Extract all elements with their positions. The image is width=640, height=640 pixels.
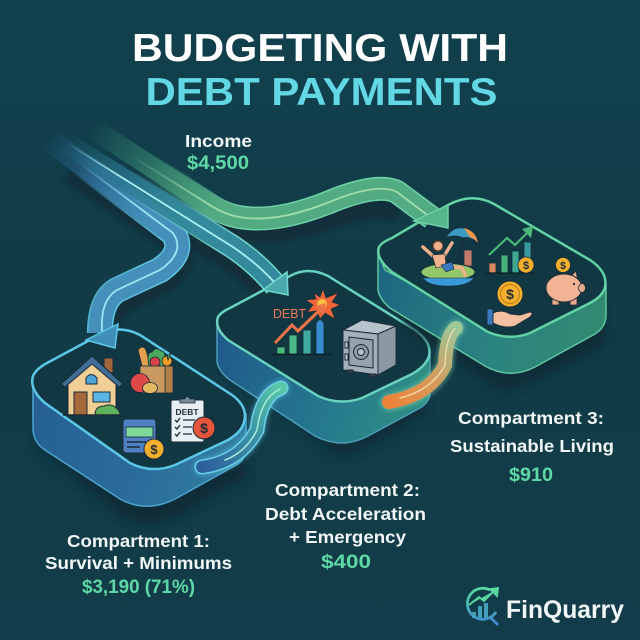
baseline: [272, 354, 332, 356]
logo: FinQuarry: [467, 588, 624, 625]
hand: [493, 311, 532, 327]
inner ring: [500, 284, 520, 304]
text: income: $4,500: [187, 153, 249, 174]
logo wordmark: FinQuarry: [506, 596, 624, 624]
calculator screen: [126, 427, 153, 437]
large coin: [497, 281, 523, 307]
arrow tip: [315, 303, 326, 315]
arrow tip: [522, 226, 533, 238]
icon: debt clipboard: [171, 396, 215, 442]
arrow: income to compartment 3: [80, 120, 448, 228]
arrow: income to compartment 1: [50, 140, 177, 348]
ear: [571, 271, 578, 281]
logo arrow: [469, 588, 498, 605]
person torso: [432, 254, 446, 268]
text: compartment 3: $910: [509, 465, 553, 486]
gold coin symbol: $: [150, 442, 158, 457]
text: compartment 2: Debt Acceleration: [265, 504, 426, 524]
umbrella pole: [456, 240, 463, 268]
umbrella accent: [464, 228, 478, 243]
icon: growth chart: [486, 226, 535, 273]
shadow: compartment 1: [36, 400, 248, 522]
logo magnifier ring: [467, 588, 498, 625]
icon: safe: [343, 320, 396, 377]
panel: compartment 3: [378, 198, 606, 390]
connector: compartment 1 to 2: [202, 388, 281, 467]
side wall: compartment 3: [378, 253, 606, 373]
title: BUDGETING WITH: [132, 27, 508, 70]
water: [423, 278, 474, 286]
clipboard clip: [180, 396, 195, 403]
umbrella canopy: [446, 228, 478, 243]
icon: beach relaxation: [421, 228, 478, 286]
clipboard label: DEBT: [176, 407, 199, 417]
island: [421, 264, 475, 280]
snout: [578, 284, 586, 292]
coin symbol: $: [560, 260, 566, 272]
shadow: compartment 2: [220, 350, 428, 455]
text: compartment 1: [45, 531, 232, 598]
person head: [433, 241, 443, 251]
title: DEBT PAYMENTS: [146, 71, 498, 114]
gold coin: [144, 439, 164, 459]
baseline: [486, 272, 535, 274]
icon: coin over hand: [487, 281, 532, 327]
text: compartment 3: Sustainable Living: [450, 436, 614, 456]
text: income: Income: [185, 131, 252, 151]
red coin symbol: $: [200, 420, 208, 436]
body: [546, 274, 582, 302]
text: compartment 2: Compartment 2:: [275, 480, 420, 500]
legs: [552, 297, 577, 305]
person arms and legs: [423, 243, 465, 275]
flow shadows: [70, 172, 400, 332]
text: income: [185, 131, 252, 174]
burst: [306, 289, 340, 319]
top face: compartment 1: [32, 329, 245, 469]
checklist rows: [175, 418, 195, 436]
coin symbol: $: [506, 286, 514, 302]
text: compartment 2: $400: [321, 552, 371, 573]
panel: compartment 1: [32, 329, 248, 522]
coin: [556, 258, 570, 272]
title: [132, 27, 508, 114]
text: compartment 1: Survival + Minimums: [45, 553, 232, 573]
cuff: [487, 309, 493, 325]
drink: [464, 250, 472, 266]
debt label: DEBT: [273, 306, 306, 321]
connector: compartment 2 to 3: [389, 328, 456, 402]
burst core: [317, 299, 327, 309]
bars: [277, 319, 324, 354]
text: compartment 3: Compartment 3:: [458, 408, 604, 428]
red dollar coin: [193, 417, 215, 439]
text: compartment 2: [265, 480, 426, 573]
coin: [518, 257, 534, 273]
eye: [573, 283, 575, 285]
text: compartment 1: $3,190 (71%): [82, 577, 195, 598]
calculator keys: [127, 442, 146, 447]
text: compartment 3: [450, 408, 614, 486]
logo bars: [472, 603, 488, 618]
top face: compartment 3: [378, 198, 605, 337]
text: compartment 2: + Emergency: [289, 527, 406, 547]
icon: piggy bank: [546, 258, 586, 305]
rising arrow: [489, 232, 528, 255]
arrow: income to compartment 2: [50, 133, 288, 295]
side wall: compartment 1: [33, 378, 246, 506]
bars: [489, 242, 531, 273]
coin symbol: $: [523, 260, 529, 272]
text: compartment 1: Compartment 1:: [67, 531, 210, 551]
icon: calculator: [123, 419, 164, 459]
calculator body: [123, 419, 156, 453]
panel: compartment 2: [217, 271, 430, 455]
clipboard sheet: [171, 400, 204, 442]
icon: grocery bag: [130, 347, 173, 394]
rising arrow: [275, 308, 322, 343]
icon: house: [61, 356, 123, 415]
icon: debt growth chart: [272, 289, 340, 354]
side wall: compartment 2: [217, 322, 430, 443]
swim shorts: [441, 262, 454, 272]
top face: compartment 2: [217, 271, 429, 402]
shadow: compartment 3: [400, 300, 606, 390]
